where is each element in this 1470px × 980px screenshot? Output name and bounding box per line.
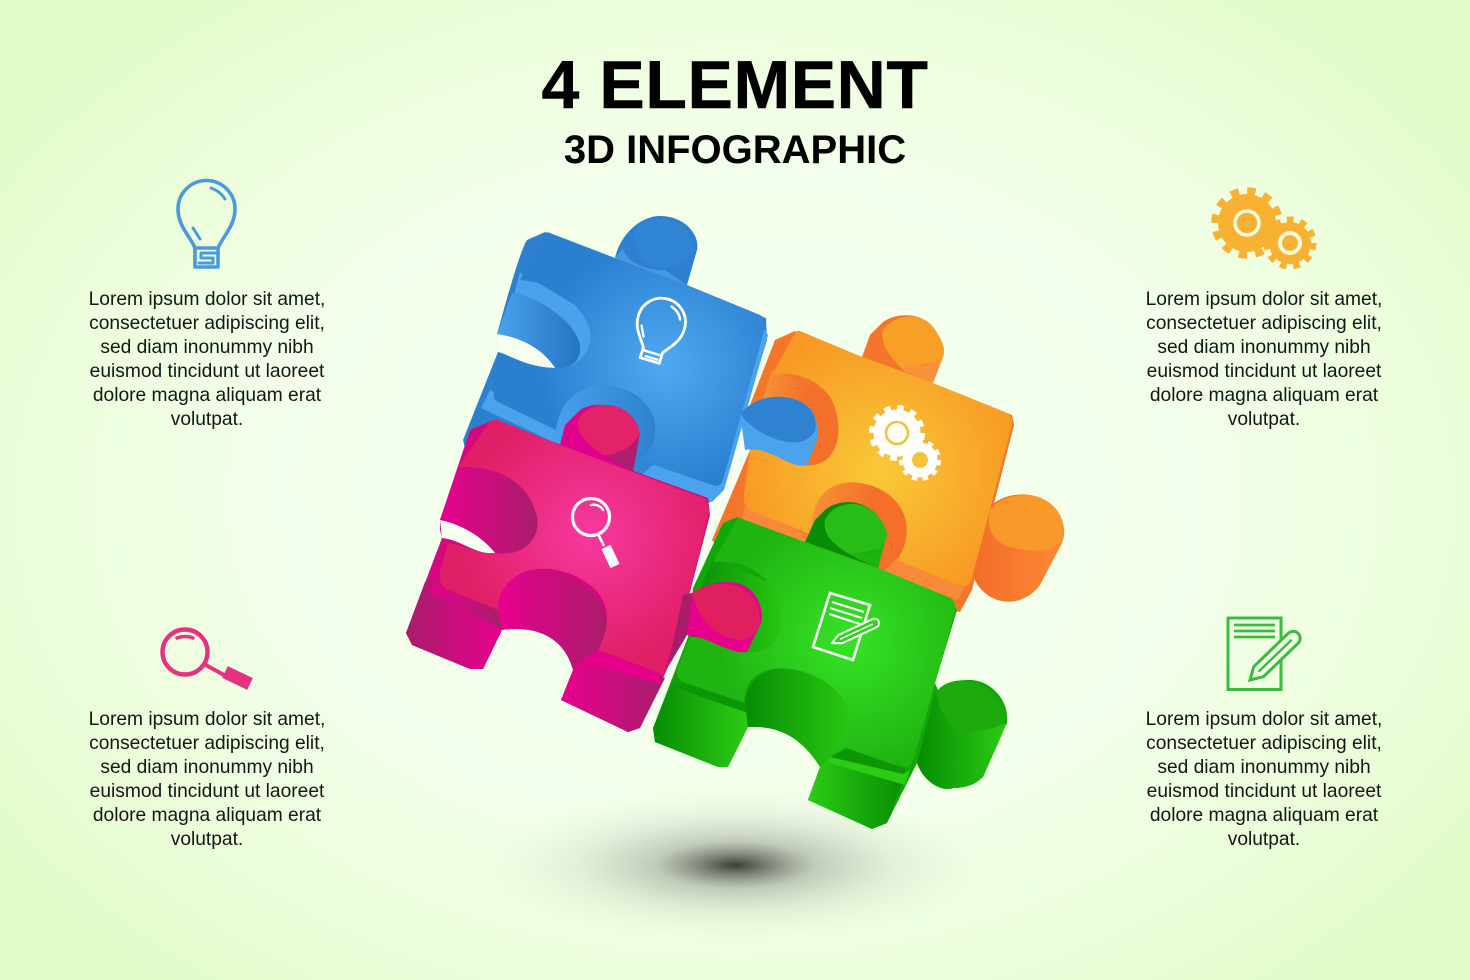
orange piece body side [712, 331, 1014, 612]
green top face [677, 518, 955, 767]
puzzle piece: pink [406, 405, 762, 732]
green left socket wall [690, 558, 792, 660]
text block: bottom right: consectetuer adipiscing elit, [1146, 733, 1382, 754]
text block: bottom left: dolore magna aliquam erat [93, 805, 321, 826]
icon: light bulb (white) [627, 292, 691, 367]
orange top face [744, 331, 1012, 586]
pink piece body side [406, 420, 710, 732]
text block: top right: sed diam inonummy nibh [1157, 337, 1371, 358]
text block: top right [1146, 289, 1382, 430]
orange top tab [862, 315, 944, 383]
legend icon: document and pencil [1228, 618, 1303, 690]
pink top face [440, 419, 709, 675]
green top tab [805, 502, 887, 568]
text block: bottom right [1146, 709, 1382, 850]
blue right tab [740, 397, 818, 466]
pink bottom socket wall [498, 568, 607, 670]
blue left socket wall [497, 293, 580, 368]
puzzle piece: orange [712, 315, 1064, 612]
blue top face [494, 232, 766, 486]
title: 4 ELEMENT [541, 47, 928, 123]
orange right tab [972, 494, 1064, 602]
pink front left block [406, 582, 502, 669]
icon: gears (white) [872, 408, 938, 478]
text block: bottom right: volutpat. [1228, 829, 1300, 850]
text block: bottom left: euismod tincidunt ut laoreet [90, 781, 324, 802]
subtitle: 3D INFOGRAPHIC [564, 128, 906, 172]
orange bottom socket wall [806, 475, 915, 590]
icon: magnifier (white) [572, 498, 615, 566]
pink front right block [561, 650, 665, 732]
pink left socket wall [440, 467, 538, 554]
text block: top left: consectetuer adipiscing elit, [89, 313, 325, 334]
green front right block [808, 757, 905, 829]
text block: bottom left: volutpat. [171, 829, 243, 850]
blue piece body side [463, 232, 767, 510]
text block: top left: euismod tincidunt ut laoreet [90, 361, 324, 382]
text block: top left [89, 289, 325, 430]
puzzle piece: blue [463, 216, 818, 510]
green bottom socket wall [745, 668, 858, 767]
text block: bottom right: euismod tincidunt ut laoreet [1147, 781, 1381, 802]
green front right strip [826, 757, 910, 785]
pink top tab [560, 405, 640, 472]
orange left socket wall [755, 370, 845, 472]
text block: top left: volutpat. [171, 409, 243, 430]
gap in pink piece [440, 520, 495, 553]
pink front right strip [580, 650, 662, 684]
gap in blue piece [497, 334, 555, 368]
text block: bottom right: Lorem ipsum dolor sit amet, [1146, 709, 1382, 730]
text block: bottom left [89, 709, 325, 850]
blue bottom socket ring [550, 375, 670, 485]
text block: top left: dolore magna aliquam erat [93, 385, 321, 406]
legend icon: light bulb [178, 180, 235, 267]
icon: document and pencil (white) [813, 593, 881, 660]
green front shading [673, 683, 906, 774]
pink front left strip [427, 583, 502, 630]
green right tab [917, 681, 1007, 789]
text block: top right: volutpat. [1228, 409, 1300, 430]
blue edge strips [481, 325, 768, 502]
legend icon: magnifier [162, 630, 250, 684]
text block: top left: Lorem ipsum dolor sit amet, [89, 289, 325, 310]
text block: top right: euismod tincidunt ut laoreet [1147, 361, 1381, 382]
text block: bottom left: sed diam inonummy nibh [100, 757, 314, 778]
puzzle: four pieces [406, 216, 1064, 829]
green piece body side [653, 517, 1007, 829]
orange bottom edge strip [740, 505, 965, 600]
text block: bottom left: Lorem ipsum dolor sit amet, [89, 709, 325, 730]
blue top tab [615, 216, 697, 285]
legend icon: gears [1216, 192, 1313, 266]
text block: top right: Lorem ipsum dolor sit amet, [1146, 289, 1382, 310]
pink right tab [668, 582, 762, 667]
text block: bottom left: consectetuer adipiscing elit, [89, 733, 325, 754]
puzzle piece: green [653, 502, 1007, 829]
floor shadow [485, 790, 985, 940]
text block: top right: consectetuer adipiscing elit, [1146, 313, 1382, 334]
text block: bottom right: sed diam inonummy nibh [1157, 757, 1371, 778]
text block: top left: sed diam inonummy nibh [100, 337, 314, 358]
green front left block [653, 668, 748, 767]
text block: bottom right: dolore magna aliquam erat [1150, 805, 1378, 826]
text block: top right: dolore magna aliquam erat [1150, 385, 1378, 406]
blue left socket ring [510, 272, 600, 378]
